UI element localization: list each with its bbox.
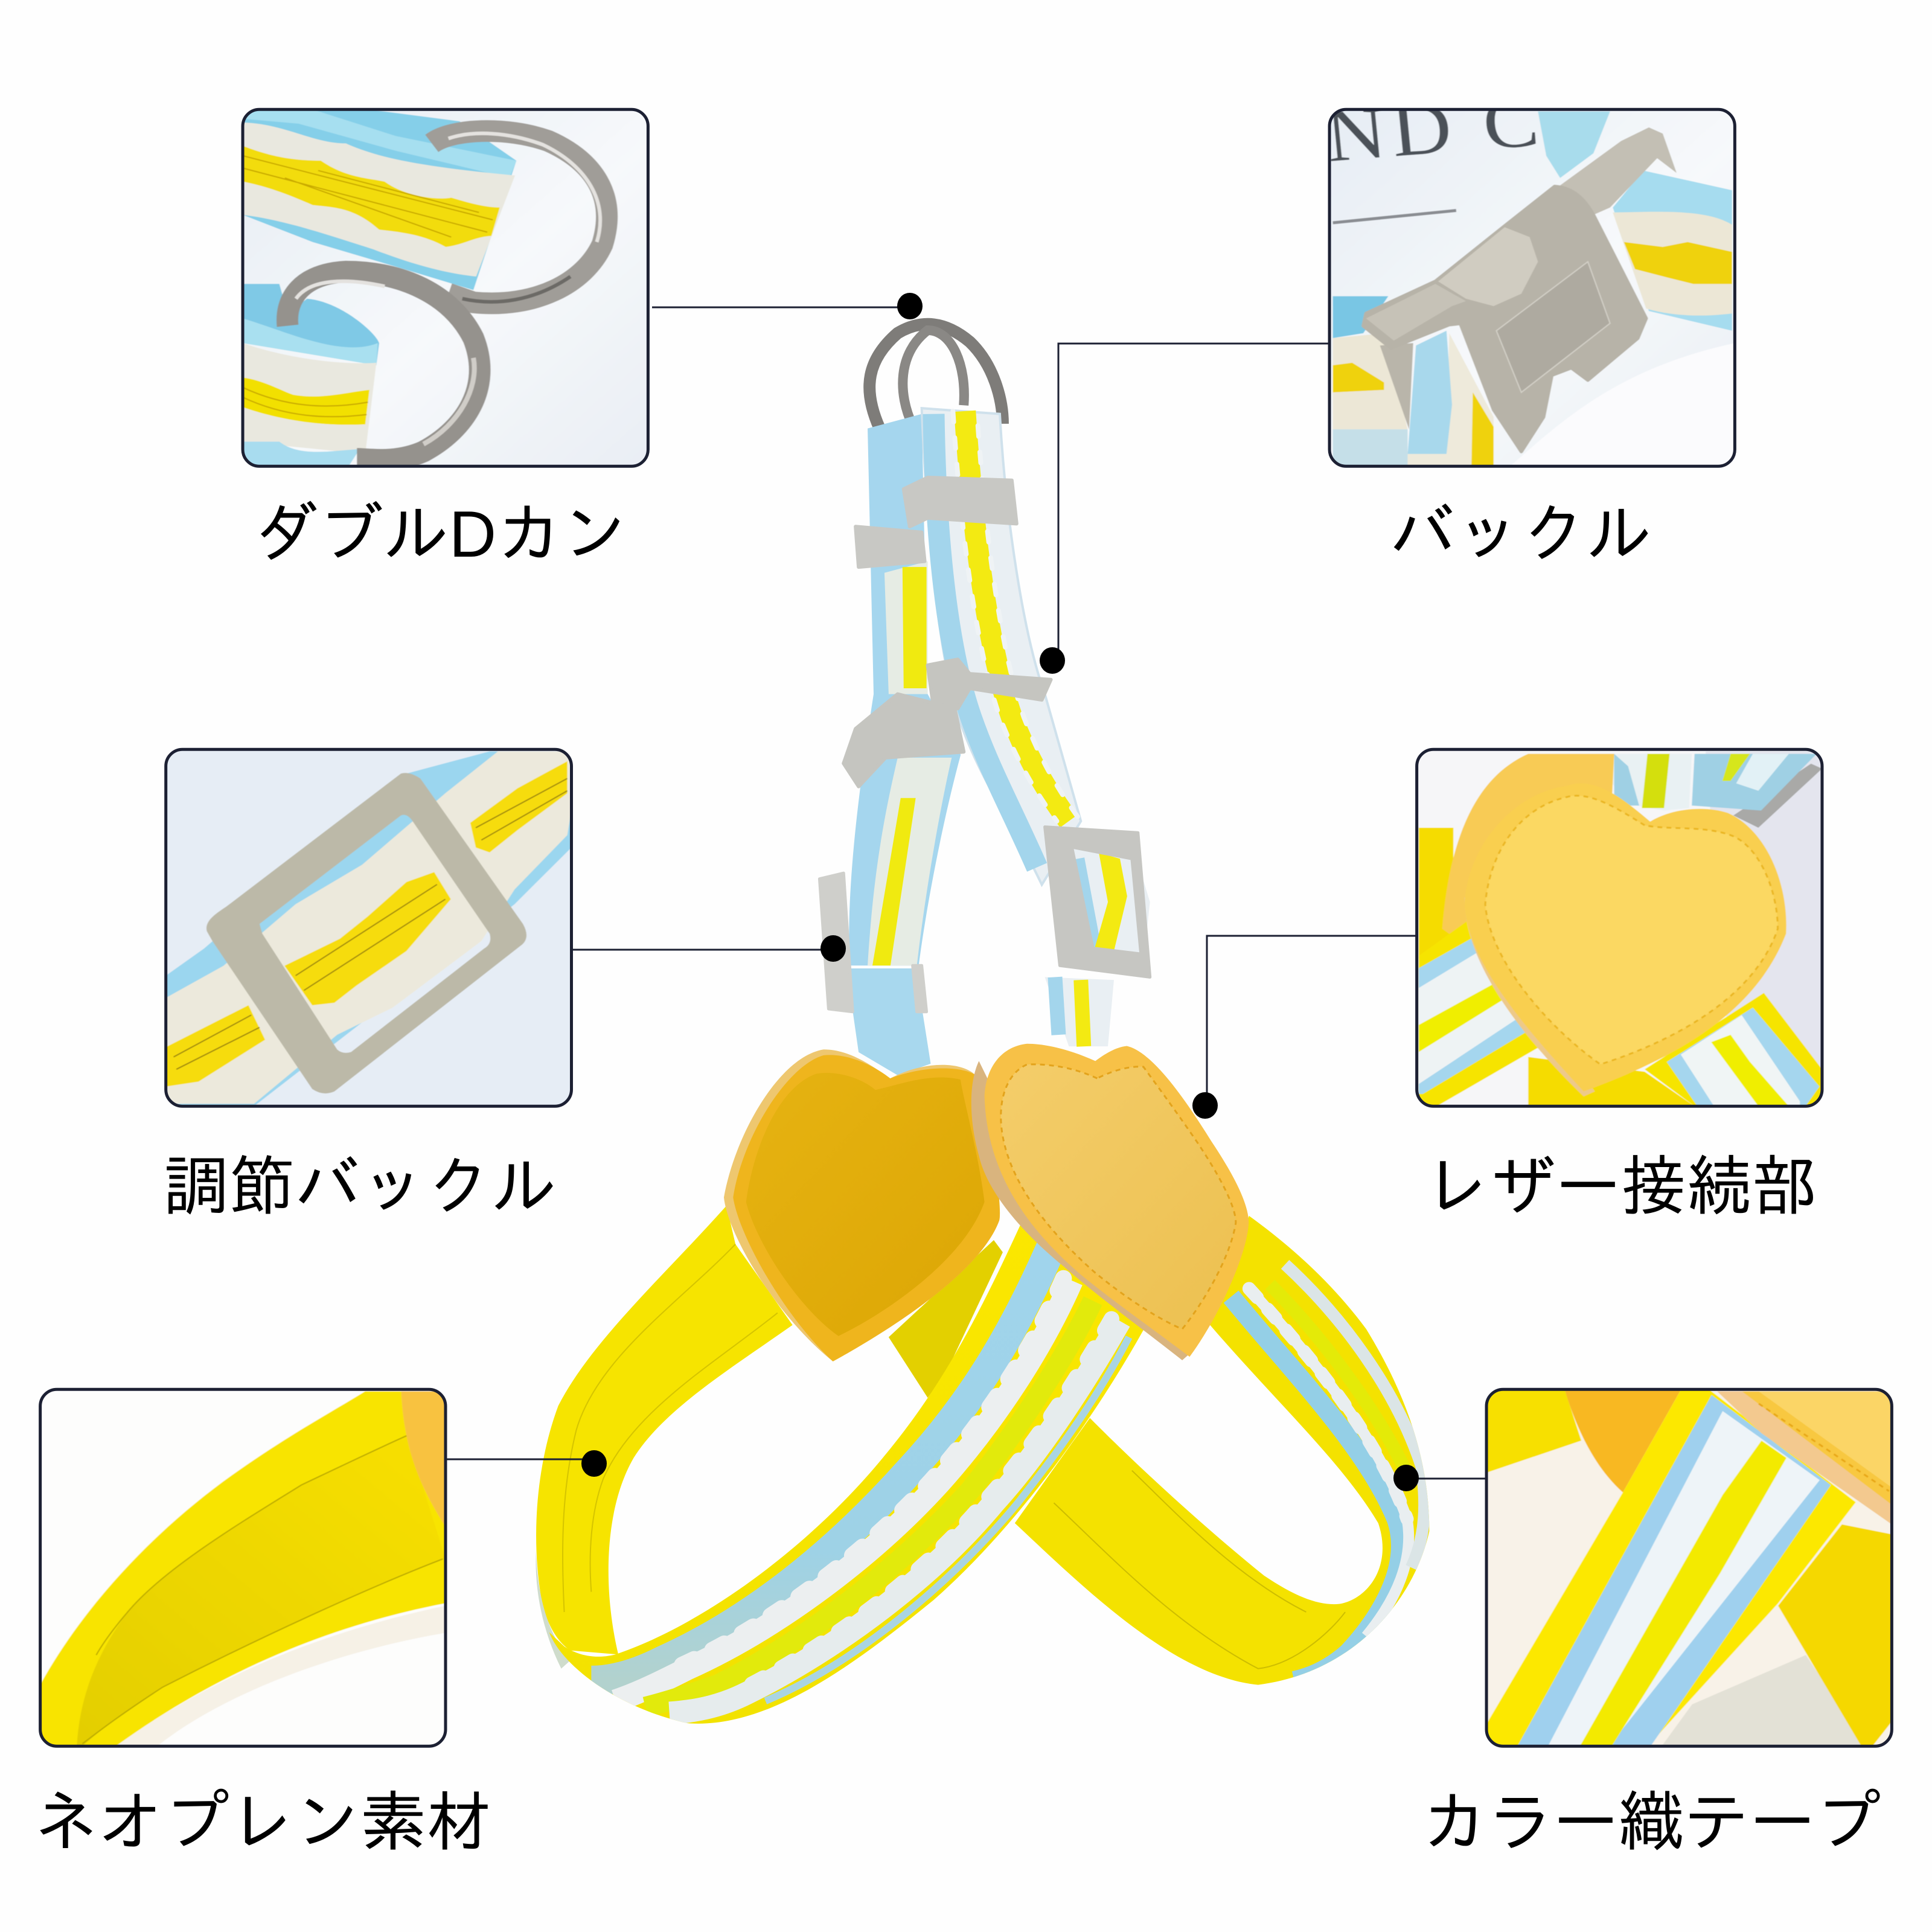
connector: adjuster buckle [572,935,846,962]
panel: leather connector photo [1417,749,1822,1106]
left loop inner face [536,1206,793,1654]
strap through right slider [1066,844,1150,957]
lower loops [536,1206,1429,1724]
connector: double D ring [652,293,923,319]
label: double D ring: ダブルDカン [252,498,627,571]
panel: double D ring photo [243,109,648,466]
front band [549,1224,1144,1724]
back slider [856,526,925,567]
panel: neoprene photo [40,1389,446,1746]
lower left slider [819,873,927,1012]
panel: buckle photo [1322,79,1735,466]
top slider [904,478,1017,526]
label: colour woven tape: カラー織テープ [1422,1786,1881,1860]
connector: leather connector [1192,936,1416,1119]
D rings [869,324,1003,429]
connector: colour tape [1393,1465,1486,1491]
harness illustration [536,324,1429,1724]
right loop stripes [1231,1264,1424,1681]
right heart [971,1044,1249,1360]
label: adjuster buckle: 調節バックル [164,1151,557,1224]
hearts [724,1044,1249,1361]
panel: buckle photo: ND C [1322,79,1548,178]
blue tab [846,968,931,1075]
label: leather connector: レザー接続部 [1424,1151,1818,1224]
label: neoprene material: ネオプレン素材 [33,1786,491,1860]
front strap [922,408,1081,884]
right slider [1045,827,1150,977]
chest buckle [843,659,1051,787]
label: buckle: バックル [1390,498,1652,571]
panel: adjuster buckle photo [166,749,572,1106]
lower strap stubs [1045,977,1114,1046]
left heart [724,1049,1000,1361]
back strap [849,414,961,965]
upper straps and hardware [819,324,1150,1075]
back band and right loop inner face [889,1240,1003,1398]
connector: neoprene [446,1450,607,1477]
connector: buckle [1040,344,1329,674]
panel: woven colour tape photo [1486,1389,1892,1746]
